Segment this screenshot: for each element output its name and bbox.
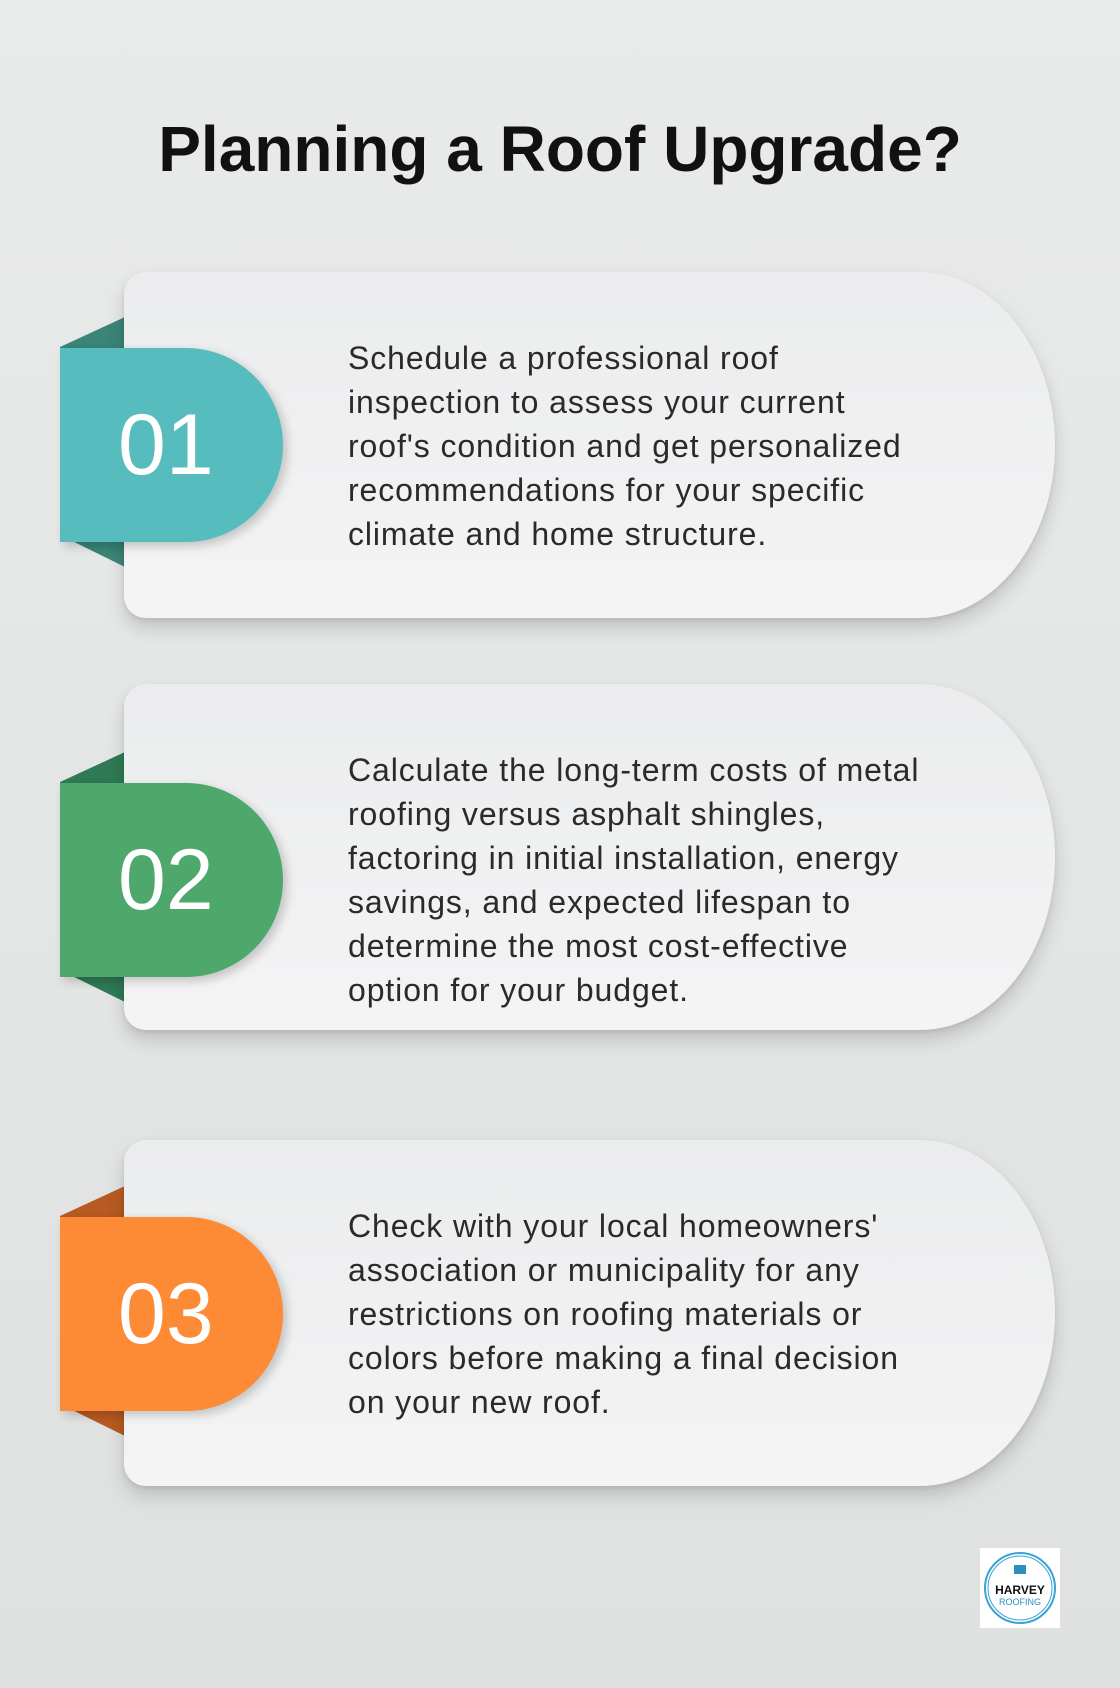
logo: ROOFING: [999, 1597, 1041, 1607]
text: step 2: Calculate the long-term costs of metal: [348, 752, 919, 788]
fold: card 2: [60, 752, 124, 1002]
badge 02: 02: [118, 832, 214, 928]
text: step 1: [348, 340, 902, 552]
panel: card 1: [124, 272, 1055, 618]
text: step 1: inspection to assess your current: [348, 384, 845, 420]
text: step 1: Schedule a professional roof: [348, 340, 779, 376]
fold: card 3: [60, 1186, 124, 1436]
text: step 3: restrictions on roofing materials or: [348, 1296, 862, 1332]
text: step 3: association or municipality for any: [348, 1252, 860, 1288]
text: step 2: factoring in initial installation, energy: [348, 840, 899, 876]
fold: card 1: [60, 318, 124, 566]
text: step 2: roofing versus asphalt shingles,: [348, 796, 825, 832]
panel: card 2: [124, 684, 1055, 1030]
text: step 2: option for your budget.: [348, 972, 689, 1008]
logo: [980, 1548, 1060, 1628]
panel: card 3: [124, 1140, 1055, 1486]
badge 01: 01: [118, 397, 214, 493]
text: step 2: savings, and expected lifespan to: [348, 884, 851, 920]
logo: HARVEY: [995, 1583, 1045, 1597]
badge 02: [60, 783, 283, 977]
text: step 1: recommendations for your specific: [348, 472, 865, 508]
text: step 3: Check with your local homeowners': [348, 1208, 878, 1244]
text: step 2: [348, 752, 919, 1008]
text: step 1: roof's condition and get personalized: [348, 428, 902, 464]
text: step 1: climate and home structure.: [348, 516, 767, 552]
title: Planning a Roof Upgrade?: [158, 113, 962, 185]
badge 03: [60, 1217, 283, 1411]
text: step 3: colors before making a final decision: [348, 1340, 899, 1376]
text: step 3: [348, 1208, 899, 1420]
badge 03: 03: [118, 1266, 214, 1362]
badge 01: [60, 348, 283, 542]
text: step 3: on your new roof.: [348, 1384, 611, 1420]
text: step 2: determine the most cost-effective: [348, 928, 848, 964]
